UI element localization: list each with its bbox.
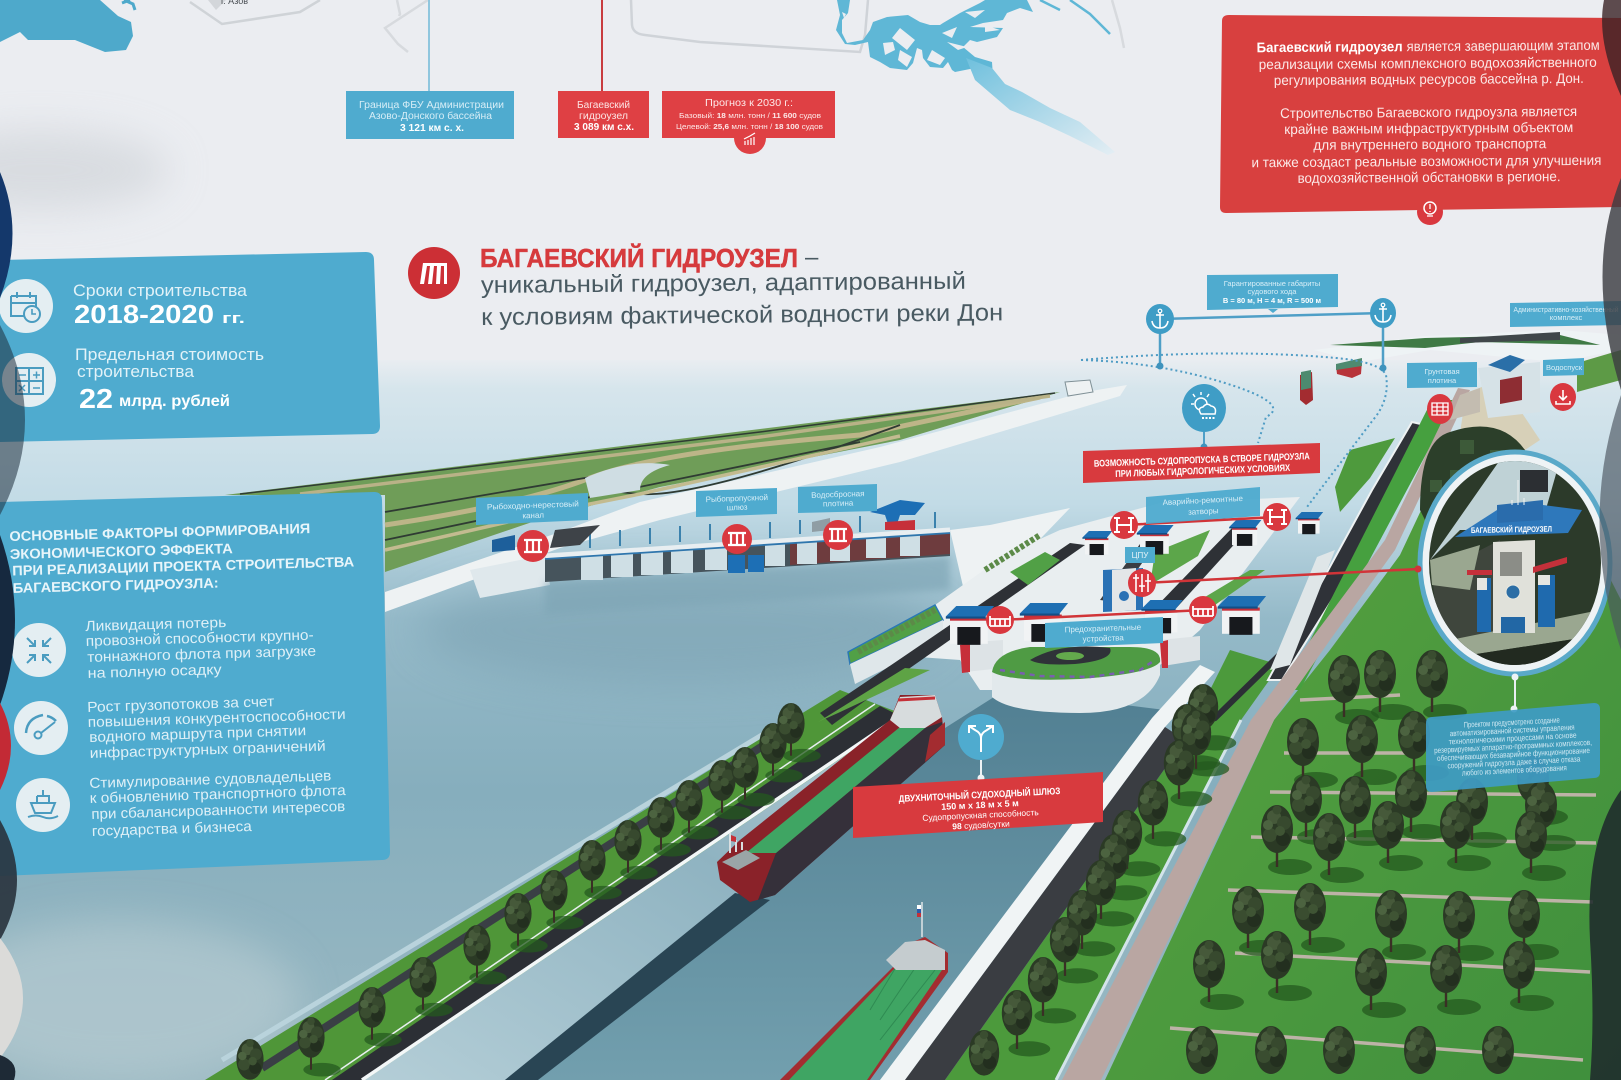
label: forecast 2030: Целевой: 25,6 млн. тонн / 18 100 судов [676, 122, 823, 131]
river delta [836, 0, 1033, 77]
label: forecast 2030 [662, 91, 835, 154]
construction cost: 22 [79, 383, 113, 414]
label: spillway dam: плотина [823, 498, 854, 509]
icon: dam [408, 247, 460, 299]
factors heading [9, 519, 355, 596]
delta islands [842, 10, 1000, 67]
factor 3 text: при сбалансированности интересов [91, 799, 346, 823]
label: border of administration: Граница ФБУ Администрации [359, 100, 504, 111]
trees along the canal road [969, 684, 1236, 1076]
lighter water to the lower left [0, 920, 300, 1080]
label: fairway dimensions: судового хода [1248, 287, 1297, 296]
label: fish lock: шлюз [727, 503, 748, 512]
subtitle [481, 267, 1003, 331]
label: passage in any hydrological conditions [1083, 443, 1320, 483]
label: administrative complex [1510, 301, 1621, 327]
note: automated control system: автоматизированной системы управления [1450, 723, 1575, 738]
left lock dyke [205, 690, 945, 1080]
wall shadow on water [505, 893, 770, 1080]
label: two-line navigation lock: Судопропускная способность [922, 807, 1039, 823]
factor 2 text: водного маршрута при снятии [89, 723, 306, 746]
label: safety devices: Предохранительные [1064, 623, 1142, 634]
panel: main factors [0, 492, 390, 876]
label: passage in any hydrological conditions: ПРИ ЛЮБЫХ ГИДРОЛОГИЧЕСКИХ УСЛОВИЯХ [1115, 463, 1291, 480]
central island [992, 646, 1160, 713]
label: two-line navigation lock: 98 судов/сутки [952, 819, 1010, 831]
note: automated control system: Проектом предусмотрено создание [1464, 716, 1560, 730]
trees on the big lawn [1186, 650, 1576, 1074]
label: water release [1543, 358, 1584, 376]
water reflection shading [420, 575, 940, 685]
construction cost: млрд. рублей [119, 393, 230, 410]
factor 2 text: Рост грузопотоков за счет [87, 694, 275, 716]
label: fish spawning channel: канал [522, 511, 544, 520]
shipping lane dotted lines [1081, 353, 1387, 507]
pin: fish lock [722, 524, 752, 554]
pavilions [946, 606, 994, 645]
inset circle: building close-up: БАГАЕВСКИЙ ГИДРОУЗЕЛ [1471, 525, 1552, 535]
panel: construction terms and cost [0, 252, 380, 442]
icon: weather pin [1182, 384, 1226, 450]
label: border of administration [346, 91, 514, 139]
callout lines [428, 0, 430, 91]
construction cost [75, 346, 264, 414]
label: repair gates: Аварийно-ремонтные [1162, 494, 1244, 507]
label: border of administration: 3 121 км с. х. [400, 123, 464, 134]
icon: ship [16, 778, 70, 832]
central tower [1103, 568, 1143, 612]
panel: red intro text: регулирования водных ресурсов бассейна р. Дон. [1274, 70, 1584, 88]
factors heading: ПРИ РЕАЛИЗАЦИИ ПРОЕКТА СТРОИТЕЛЬСТВА [12, 553, 354, 578]
factors heading: ОСНОВНЫЕ ФАКТОРЫ ФОРМИРОВАНИЯ [9, 520, 310, 544]
construction period: гг. [222, 310, 245, 327]
inset circle: building close-up [1414, 450, 1610, 680]
label: Bagaevsky hydro-complex km: гидроузел [579, 111, 628, 122]
factor 3 text: к обновлению транспортного флота [90, 783, 347, 807]
label: earth dam: Грунтовая [1424, 367, 1460, 376]
right bank [880, 380, 1621, 1080]
label: Bagaevsky hydro-complex km [558, 91, 649, 138]
label: fish spawning channel: Рыбоходно-нерестовый [487, 499, 579, 512]
ship in canal [780, 902, 948, 1080]
factor 3 text: Стимулирование судовладельцев [89, 768, 332, 792]
label: forecast 2030: Базовый: 18 млн. тонн / 11 600 судов [679, 111, 821, 120]
factor 1 text: провозной способности крупно- [86, 628, 314, 650]
balloons right foreground [1589, 0, 1621, 1080]
factors heading: БАГАЕВСКОГО ГИДРОУЗЛА: [13, 575, 219, 596]
label: spillway dam [798, 484, 877, 513]
factor 1 text: Ликвидация потерь [85, 615, 227, 635]
ship in lock [717, 695, 945, 902]
map fragment [0, 0, 1124, 155]
factor 3 text: государства и бизнеса [92, 819, 253, 840]
construction period [73, 282, 248, 329]
icon: calculator [2, 353, 56, 407]
ships upstream [1300, 358, 1362, 405]
panel: red intro text: реализации схемы комплексного водохозяйственного [1259, 54, 1597, 72]
upstream far shore [1314, 330, 1621, 420]
panel: red intro text: для внутреннего водного транспорта [1313, 135, 1547, 153]
title block [408, 243, 1003, 331]
construction period: 2018-2020 [74, 299, 214, 329]
label: Bagaevsky hydro-complex km: Багаевский [577, 100, 630, 111]
canal water [505, 690, 1165, 1080]
construction cost: Предельная стоимость [75, 346, 264, 364]
lock complex [818, 497, 1335, 725]
balloons left foreground [0, 172, 25, 1080]
label: fish lock: Рыбопропускной [705, 493, 768, 504]
label: repair gates: затворы [1188, 506, 1219, 517]
factor 1 text [85, 613, 317, 682]
pin: earth dam [1427, 394, 1453, 424]
soft fold shadow [0, 130, 170, 210]
spillway dam [470, 500, 950, 615]
label: spillway dam: Водосбросная [811, 489, 865, 500]
pin: repair gates left [1110, 511, 1138, 539]
icon: calendar clock [0, 279, 53, 333]
label: two-line navigation lock [853, 772, 1103, 838]
label: repair gates [1146, 487, 1260, 524]
pin: safety device right [1189, 596, 1217, 624]
factor 2 text: инфраструктурных ограничений [90, 739, 326, 762]
sea of Azov [0, 0, 133, 52]
anchor pins with connector [1146, 298, 1396, 372]
label: earth dam: плотина [1428, 376, 1457, 385]
panel: red intro text: крайне важным инфраструктурным объектом [1284, 119, 1573, 137]
water surface [0, 360, 1621, 1080]
lock gates [960, 640, 1003, 672]
icon: speedometer [14, 701, 68, 755]
pin: spillway dam [823, 520, 853, 550]
label: fairway dimensions [1207, 274, 1338, 313]
label: administrative complex: комплекс [1550, 313, 1582, 322]
label: Bagaevsky hydro-complex km: 3 089 км с.х. [574, 122, 634, 133]
factors heading: ЭКОНОМИЧЕСКОГО ЭФФЕКТА [10, 540, 233, 562]
label: safety devices: устройства [1082, 633, 1124, 644]
panel: red intro text: водохозяйственной обстановки в регионе. [1297, 168, 1561, 186]
construction period: Сроки строительства [73, 282, 248, 300]
icon: compress arrows [12, 623, 66, 677]
construction cost: строительства [77, 363, 195, 381]
pin: fish channel [517, 530, 549, 562]
pin: safety device left [986, 606, 1014, 634]
label: central control [1125, 547, 1155, 563]
callout line red [601, 0, 603, 91]
lawn footpaths [1170, 695, 1596, 1060]
note: automated control system: сооружений гидроузла даже в случае отказа [1447, 754, 1581, 770]
label: water release: Водоспуск [1546, 363, 1583, 372]
panel: red intro text: и также создаст реальные возможности для улучшения [1251, 152, 1601, 170]
panel: red intro text [1220, 15, 1621, 225]
label: fish spawning channel [476, 493, 588, 525]
heading dash: – [805, 244, 819, 271]
label: passage in any hydrological conditions: ВОЗМОЖНОСТЬ СУДОПРОПУСКА В СТВОРЕ ГИДРОУЗЛА [1094, 451, 1310, 470]
heading: БАГАЕВСКИЙ ГИДРОУЗЕЛ [480, 243, 798, 273]
factor 2 text: повышения конкурентоспособности [88, 707, 346, 731]
label: forecast 2030: Прогноз к 2030 г.: [705, 98, 793, 109]
red connector lines [1000, 517, 1418, 620]
pin: two-line lock [958, 714, 1004, 782]
trees on the left dyke [236, 703, 821, 1080]
label: fairway dimensions: B = 80 м, H = 4 м, R = 500 м [1223, 296, 1322, 305]
subtitle: к условиям фактической водности реки Дон [481, 299, 1003, 331]
panel: red intro text: Багаевский гидроузел [1257, 38, 1403, 55]
label: earth dam [1407, 362, 1477, 388]
factor 2 text [87, 692, 347, 762]
factor 3 text [89, 768, 348, 840]
label: border of administration: Азово-Донского бассейна [369, 110, 492, 122]
factor 1 text: тоннажного флота при загрузке [87, 644, 316, 666]
label: central control: ЦПУ [1132, 551, 1149, 560]
factor 1 text: на полную осадку [87, 662, 223, 682]
label: two-line navigation lock: ДВУХНИТОЧНЫЙ СУДОХОДНЫЙ ШЛЮЗ [898, 785, 1061, 805]
panel: red intro text: Строительство Багаевского гидроузла является [1280, 103, 1577, 121]
label: safety devices [1045, 617, 1163, 648]
note: automated control system: технологическими процессами на основе [1448, 731, 1577, 746]
far left bank with fields [225, 380, 1127, 612]
label: two-line navigation lock: 150 м х 18 м х 5 м [941, 798, 1019, 812]
connector to note [1510, 674, 1518, 712]
label: fairway dimensions: Гарантированные габариты [1224, 279, 1320, 288]
subtitle: уникальный гидроузел, адаптированный [481, 268, 966, 299]
panel: red intro text: является завершающим этапом [1407, 37, 1600, 54]
pin: repair gates right [1263, 503, 1291, 531]
pin: control sliders [1128, 569, 1156, 597]
note: automated control system [1426, 703, 1600, 792]
note: automated control system: любого из элементов оборудования [1462, 763, 1567, 778]
label: fish lock [696, 488, 777, 517]
pin: water release [1550, 383, 1576, 411]
